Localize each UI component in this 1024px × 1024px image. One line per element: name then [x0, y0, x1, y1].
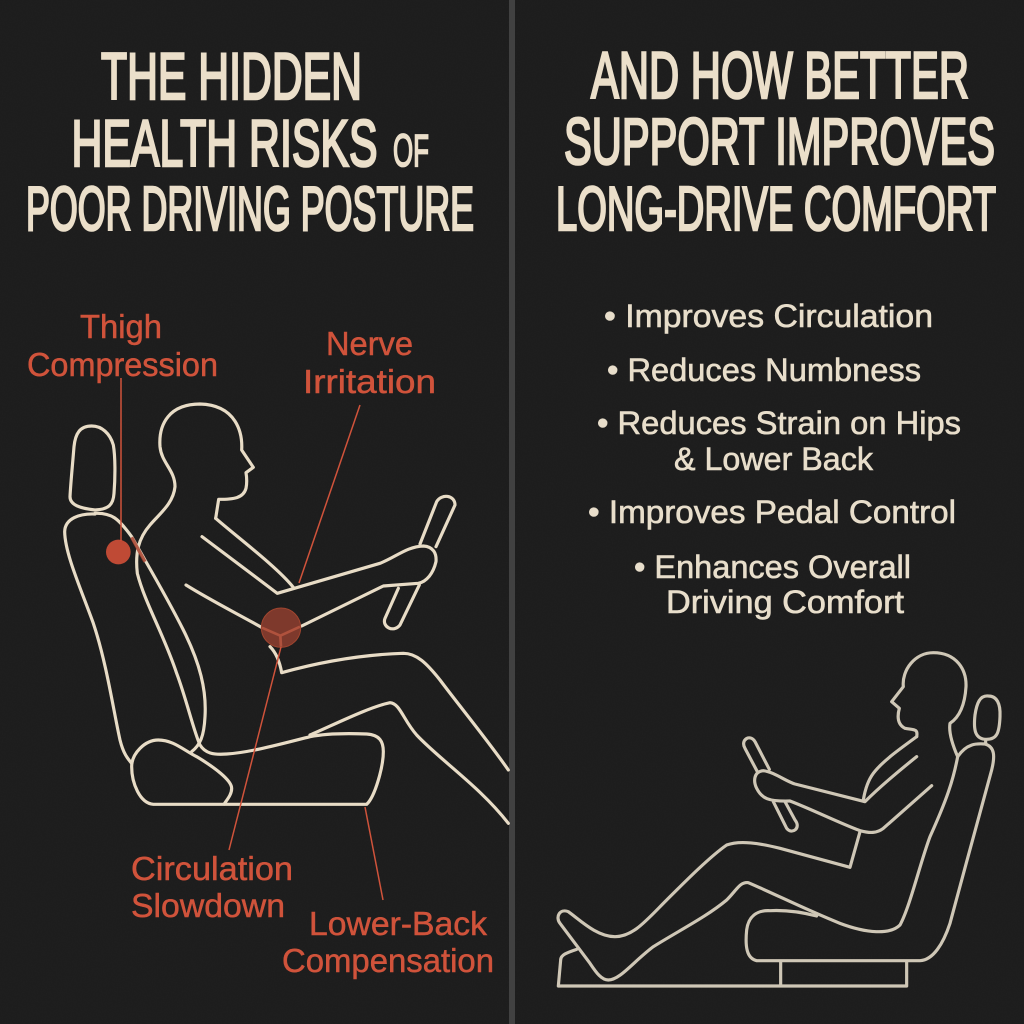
steering wheel — [744, 738, 797, 831]
panel: risks of poor posture — [26, 39, 508, 979]
benefits list: • Enhances Overall — [634, 549, 911, 585]
label: nerve irritation: Nerve — [326, 325, 413, 362]
head and body outline — [558, 653, 966, 980]
diagram: slouched driver in seat — [65, 404, 508, 823]
label: thigh compression: Thigh — [80, 308, 162, 345]
label: thigh compression: Compression — [27, 346, 218, 383]
panel: better support benefits — [556, 38, 1000, 986]
benefits list: • Improves Circulation — [604, 298, 933, 334]
arm — [755, 737, 932, 832]
label: circulation slowdown — [131, 850, 293, 924]
leader line: thigh compression — [120, 378, 122, 541]
heading: hidden health risks: THE HIDDEN — [101, 39, 362, 113]
benefits list: • Reduces Numbness — [607, 352, 921, 388]
leader line: circulation slowdown — [229, 647, 281, 850]
seat base and footrest — [558, 949, 907, 986]
heading: hidden health risks: OF — [393, 125, 429, 176]
label: lower-back compensation — [282, 905, 494, 979]
heading: hidden health risks: HEALTH RISKS — [72, 106, 378, 180]
benefits list — [588, 298, 961, 620]
heading: better support — [556, 38, 996, 244]
label: thigh compression — [27, 308, 218, 383]
benefits list: & Lower Back — [674, 441, 874, 477]
benefits list: • Reduces Strain on Hips — [597, 405, 961, 441]
benefits list: • Improves Pedal Control — [588, 494, 956, 530]
seat back — [65, 513, 205, 763]
headrest — [974, 696, 1000, 744]
heading: hidden health risks — [26, 39, 474, 244]
seat — [746, 744, 994, 961]
label: nerve irritation: Irritation — [303, 363, 436, 400]
label: circulation slowdown: Circulation — [131, 850, 293, 887]
leader line: nerve irritation — [299, 405, 360, 583]
label: nerve irritation — [303, 325, 436, 400]
headrest — [70, 426, 115, 510]
benefits list: Driving Comfort — [666, 584, 904, 620]
marker: thigh compression — [106, 537, 145, 564]
diagram: supported driver in seat — [558, 653, 1000, 986]
label: lower-back compensation: Compensation — [282, 942, 494, 979]
steering wheel — [384, 496, 455, 629]
leader line: lower-back compensation — [365, 807, 383, 900]
marker: circulation point — [261, 608, 301, 647]
body and seat cushion outline — [132, 404, 383, 804]
label: circulation slowdown: Slowdown — [131, 887, 285, 924]
legs — [270, 647, 508, 823]
heading: hidden health risks: POOR DRIVING POSTURE — [26, 175, 474, 244]
arms — [186, 518, 436, 628]
label: lower-back compensation: Lower-Back — [309, 905, 488, 942]
